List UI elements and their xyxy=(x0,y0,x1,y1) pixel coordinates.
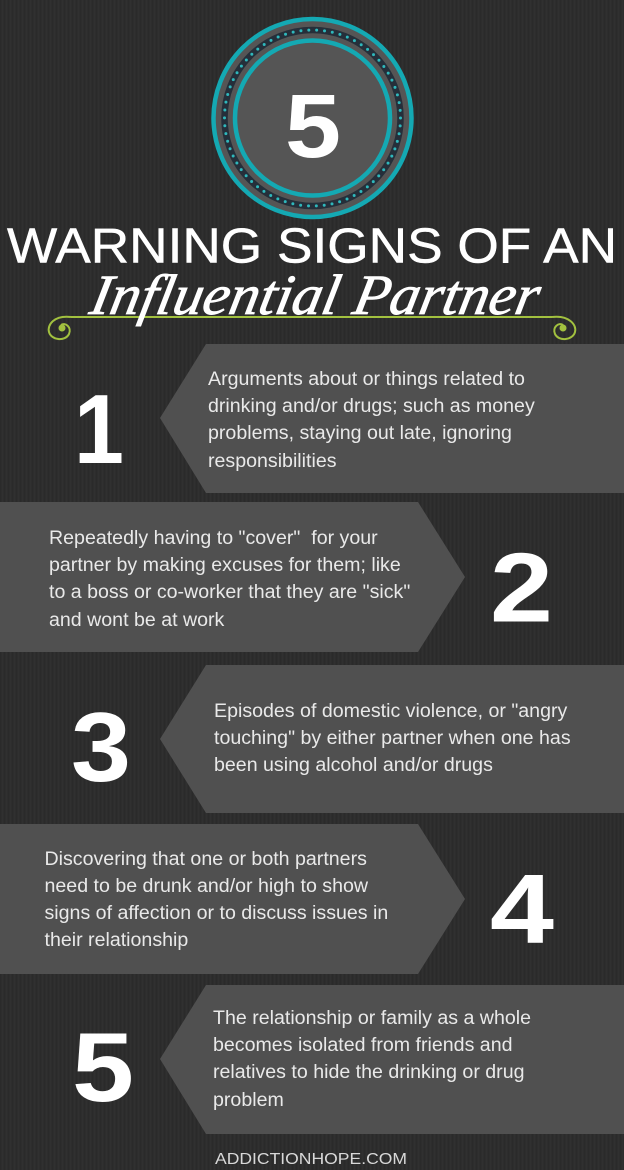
text: sign 2: partner by making excuses for them; like xyxy=(49,554,401,576)
panel: sign 2 xyxy=(0,502,465,652)
text: sign 3: touching" by either partner when one has xyxy=(214,727,571,749)
text: sign 4: Discovering that one or both partners xyxy=(44,848,367,870)
sign 1 xyxy=(74,344,624,493)
divider: green flourish xyxy=(49,317,575,339)
sign 5 xyxy=(72,985,624,1134)
panel: sign 3 xyxy=(160,665,624,813)
text: sign 4: signs of affection or to discuss issues in xyxy=(44,902,388,924)
text: sign 5: becomes isolated from friends and xyxy=(213,1034,513,1056)
text: sign 5: relatives to hide the drinking or drug xyxy=(213,1061,525,1083)
text: sign 4: their relationship xyxy=(44,929,188,951)
text: sign 5: problem xyxy=(213,1089,284,1111)
subtitle: influential partner: Influential Partner xyxy=(84,264,547,327)
number 1: 1 xyxy=(74,374,124,484)
panel: sign 1 xyxy=(160,344,624,493)
sign 2 xyxy=(0,502,553,652)
footer: source: ADDICTIONHOPE.COM xyxy=(215,1151,407,1168)
text: sign 1: Arguments about or things related to xyxy=(208,368,525,390)
number 3: 3 xyxy=(71,692,131,802)
text: sign 2: and wont be at work xyxy=(49,609,225,631)
sign 4 xyxy=(0,824,554,974)
text: sign 2: to a boss or co-worker that they are "sick" xyxy=(49,581,410,603)
text: sign 5: The relationship or family as a whole xyxy=(213,1007,531,1029)
panel: sign 5 xyxy=(160,985,624,1134)
panel: sign 4 xyxy=(0,824,465,974)
badge: number 5: 5 xyxy=(285,77,341,177)
text: sign 4: need to be drunk and/or high to show xyxy=(44,875,369,897)
number 2: 2 xyxy=(490,532,553,642)
number 5: 5 xyxy=(72,1012,134,1122)
sign 3 xyxy=(71,665,624,813)
text: sign 2: Repeatedly having to "cover" for your xyxy=(49,527,378,549)
text: sign 3: Episodes of domestic violence, or "angry xyxy=(214,700,567,722)
number 4: 4 xyxy=(490,854,554,964)
text: sign 3: been using alcohol and/or drugs xyxy=(214,754,493,776)
text: sign 1: problems, staying out late, ignoring xyxy=(208,422,512,444)
text: sign 1: responsibilities xyxy=(208,450,337,472)
title: warning signs: WARNING SIGNS OF AN xyxy=(7,220,617,274)
text: sign 1: drinking and/or drugs; such as money xyxy=(208,395,535,417)
badge: number 5 xyxy=(214,19,412,217)
